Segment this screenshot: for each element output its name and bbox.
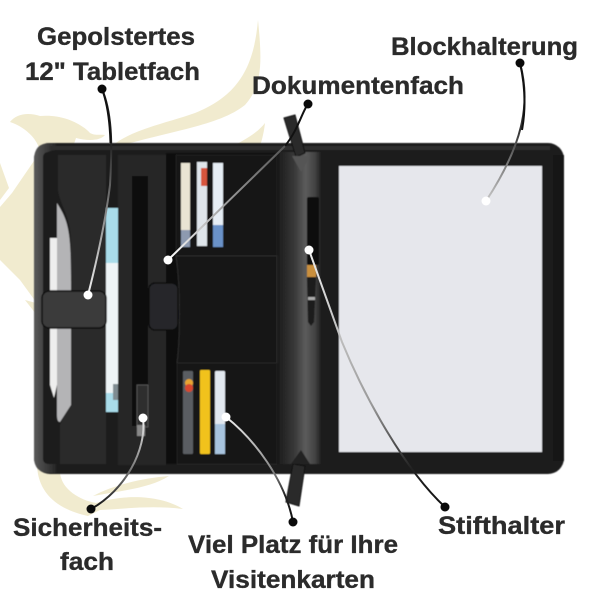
mesh badge	[149, 283, 178, 330]
top zipper pull	[284, 115, 310, 172]
top zip edge	[50, 146, 550, 150]
folder: open black zip portfolio	[34, 115, 564, 506]
label: Viel Platz für Ihre Visitenkarten	[188, 531, 398, 594]
right zip rim	[553, 155, 564, 461]
right panel	[322, 152, 554, 464]
leader: Tablet	[84, 84, 111, 300]
label: Sicherheitsfach: Sicherheits-	[13, 514, 162, 542]
leader: Visitenkarten	[222, 412, 298, 526]
background phoenix watermark	[0, 20, 265, 516]
tablet pocket flap	[58, 155, 106, 464]
stylus pen	[50, 238, 57, 398]
label: Stifthalter: Stifthalter	[438, 512, 565, 540]
pen	[307, 197, 319, 326]
upper cards	[181, 162, 223, 247]
closure strap	[42, 291, 106, 328]
label: Gepolstertes 12" Tabletfach: Gepolstertes	[37, 23, 195, 51]
spine	[279, 152, 322, 464]
lower card slots	[177, 363, 277, 464]
document pocket sheet	[176, 256, 277, 363]
left panel	[43, 152, 278, 464]
label: Gepolstertes 12" Tabletfach	[25, 23, 200, 86]
label: Sicherheitsfach	[13, 514, 162, 576]
leader: Sicherheitsfach	[86, 414, 148, 514]
notepad paper	[339, 166, 542, 452]
label: Gepolstertes 12" Tabletfach: 12" Tabletfach	[25, 58, 200, 86]
label: Dokumentenfach: Dokumentenfach	[252, 72, 464, 100]
bottom zipper pull	[286, 450, 310, 506]
label: Blockhalterung: Blockhalterung	[391, 33, 578, 61]
leader: Dokumentenfach	[164, 100, 312, 264]
leader: Blockhalterung	[482, 58, 525, 206]
light blue document	[106, 208, 118, 412]
upper card slots panel	[166, 153, 278, 464]
left zip rim	[34, 143, 56, 473]
folder body	[34, 143, 564, 474]
label: Sicherheitsfach: fach	[60, 548, 114, 576]
lower cards	[183, 370, 225, 454]
leader: Stifthalter	[304, 246, 450, 512]
tablet device	[57, 203, 71, 422]
label: Viel Platz für Ihre Visitenkarten: Viel Platz für Ihre	[188, 531, 398, 559]
label: Viel Platz für Ihre Visitenkarten: Visitenkarten	[211, 566, 375, 594]
security pocket zipper	[118, 155, 166, 465]
